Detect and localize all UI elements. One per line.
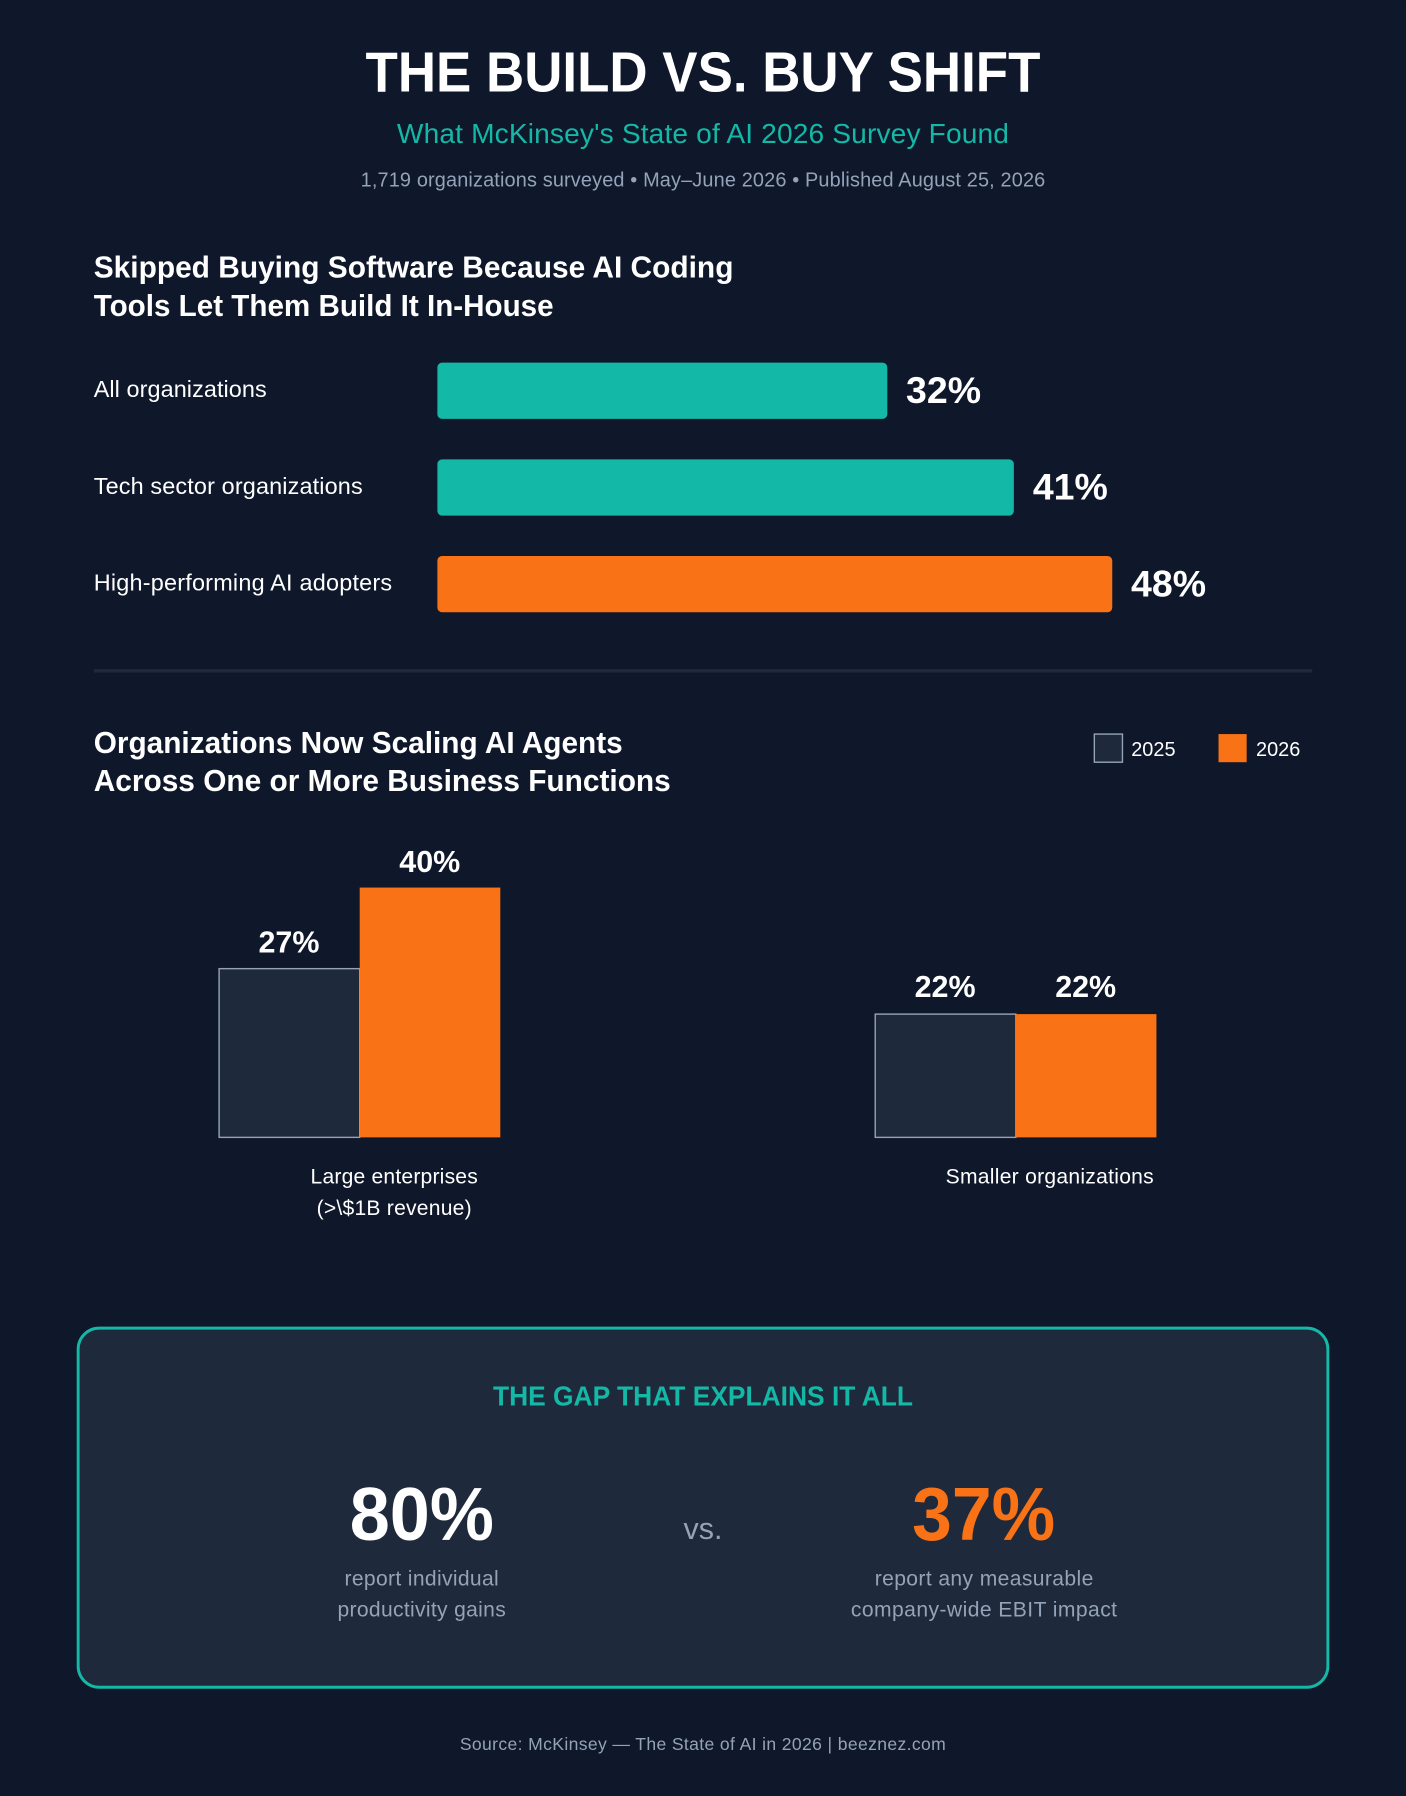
bar row: high-performing AI adopters — [94, 556, 1206, 612]
columns: large enterprises: 40% — [399, 845, 460, 879]
columns: large enterprises: Large enterprises — [311, 1165, 478, 1188]
heading: skipped buying software: Tools Let Them Build It In-House — [94, 289, 554, 323]
source footer: Source: McKinsey — The State of AI in 2026 | beeznez.com — [460, 1734, 946, 1754]
stat: 37 percent: 37% — [912, 1472, 1055, 1556]
stat: 80 percent: report individual — [345, 1567, 499, 1590]
stat: 80 percent: productivity gains — [338, 1598, 506, 1621]
columns: large enterprises — [219, 845, 500, 1220]
stat: 37 percent — [851, 1472, 1117, 1621]
bar row: tech sector organizations: Tech sector organizations — [94, 473, 363, 499]
legend — [1094, 734, 1300, 762]
bar row: all organizations — [94, 363, 981, 419]
bar row: high-performing AI adopters: 48% — [1131, 562, 1206, 604]
columns: large enterprises: 27% — [258, 926, 319, 960]
columns: large enterprises: (>\$1B revenue) — [317, 1197, 472, 1220]
stat: 80 percent — [338, 1472, 506, 1621]
columns: smaller organizations — [875, 970, 1156, 1188]
stat: 37 percent: company-wide EBIT impact — [851, 1598, 1117, 1621]
panel: scaling AI agents column chart — [94, 726, 1300, 1220]
columns: smaller organizations: Smaller organizations — [946, 1165, 1154, 1188]
versus label: vs. — [684, 1512, 722, 1546]
subtitle: What McKinsey's State of AI 2026 Survey Found — [397, 118, 1009, 149]
heading: scaling AI agents — [94, 726, 671, 798]
legend: 2025 — [1131, 739, 1176, 761]
bar row: all organizations: All organizations — [94, 376, 267, 402]
panel: the gap callout — [78, 1328, 1328, 1687]
stat: 37 percent: report any measurable — [875, 1567, 1094, 1590]
bar row: high-performing AI adopters: High-performing AI adopters — [94, 570, 392, 596]
callout heading: THE GAP THAT EXPLAINS IT ALL — [493, 1380, 913, 1411]
heading: skipped buying software: Skipped Buying Software Because AI Coding — [94, 251, 733, 285]
stat: 80 percent: 80% — [350, 1472, 494, 1556]
bar row: tech sector organizations: 41% — [1033, 466, 1108, 508]
bar row: all organizations: 32% — [906, 369, 981, 411]
bar row: tech sector organizations — [94, 459, 1108, 516]
survey details: 1,719 organizations surveyed • May–June 2026 • Published August 25, 2026 — [361, 169, 1045, 191]
panel: build instead of buy bar chart — [94, 251, 1206, 612]
title: THE BUILD VS. BUY SHIFT — [366, 40, 1040, 103]
columns: smaller organizations: 22% — [1055, 970, 1116, 1004]
columns: smaller organizations: 22% — [915, 970, 976, 1004]
heading: skipped buying software — [94, 251, 733, 323]
legend: 2026 — [1256, 739, 1300, 761]
heading: scaling AI agents: Organizations Now Scaling AI Agents — [94, 726, 623, 760]
heading: scaling AI agents: Across One or More Business Functions — [94, 764, 671, 798]
